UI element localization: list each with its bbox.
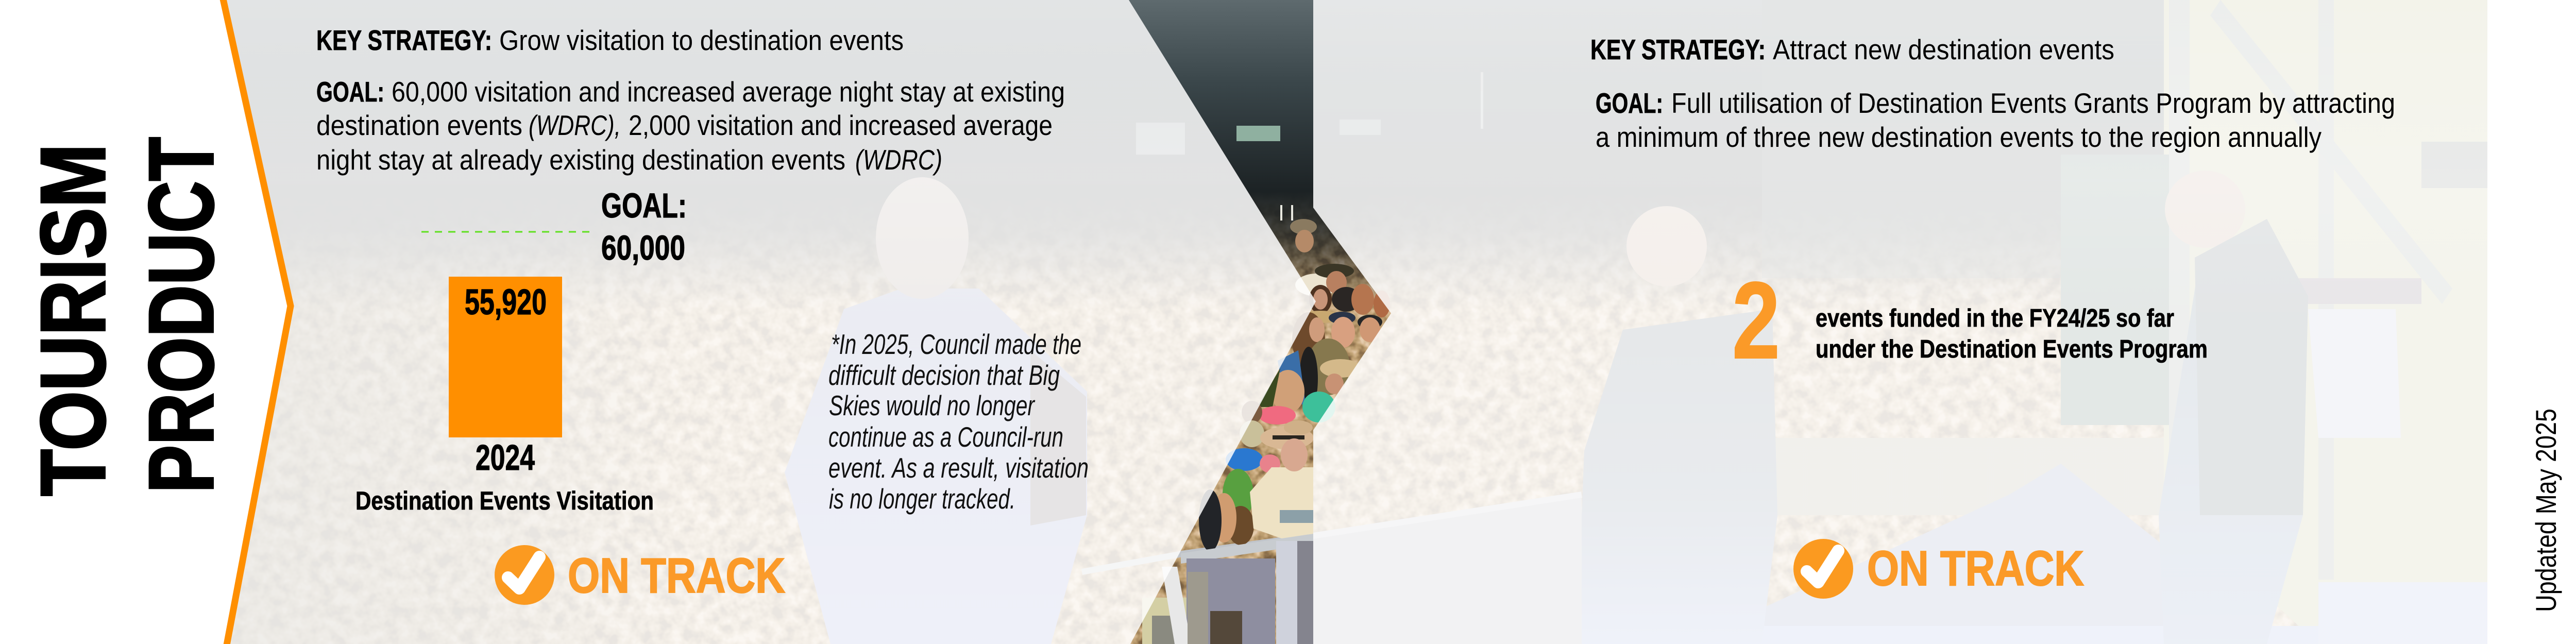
crowd seen through chevron xyxy=(1142,219,1390,644)
title: tourism product xyxy=(22,137,232,496)
italic footnote xyxy=(828,328,1089,515)
big number: 2 xyxy=(1732,259,1780,381)
right key strategy text: KEY STRATEGY: xyxy=(1590,33,1766,65)
icon: check circle xyxy=(495,545,554,605)
left goal text: destination events xyxy=(316,109,522,141)
right performer two xyxy=(2159,219,2308,644)
goal label xyxy=(601,187,687,267)
italic footnote: event. As a result, visitation xyxy=(828,452,1089,484)
stat description xyxy=(1816,304,2208,363)
venue lights xyxy=(1136,123,1185,155)
on track label: ON TRACK xyxy=(1867,541,2084,596)
goal dashed line xyxy=(421,231,590,233)
goal label: 60,000 xyxy=(601,229,685,267)
italic footnote: *In 2025, Council made the xyxy=(831,328,1081,360)
on track label: ON TRACK xyxy=(568,548,785,603)
chart caption: Destination Events Visitation xyxy=(355,486,654,515)
left goal text: night stay at already existing destination events xyxy=(316,144,845,176)
right performer one xyxy=(1577,309,1777,644)
left white title panel xyxy=(0,0,291,644)
left translucent panel xyxy=(227,0,1316,644)
right white margin xyxy=(2487,0,2576,644)
title: tourism product: TOURISM xyxy=(22,144,124,496)
left key strategy text: Grow visitation to destination events xyxy=(499,24,904,56)
right key strategy text xyxy=(1590,33,2114,65)
front barrier behind right panel xyxy=(1313,495,1582,644)
right key strategy text: Attract new destination events xyxy=(1773,33,2114,65)
updated date note: Updated May 2025 xyxy=(2530,409,2562,612)
left goal text: 60,000 visitation and increased average night stay at existing xyxy=(392,76,1065,108)
right on track status xyxy=(1793,539,2084,599)
left goal text: GOAL: xyxy=(316,76,384,108)
right goal text xyxy=(1596,87,2395,153)
left goal text xyxy=(316,76,1065,176)
bar value: 55,920 xyxy=(465,282,547,322)
left key strategy text xyxy=(316,24,904,56)
title: tourism product: PRODUCT xyxy=(130,137,232,493)
icon: check circle xyxy=(1793,539,1853,599)
left goal text: 2,000 visitation and increased average xyxy=(629,109,1053,141)
right translucent panel xyxy=(1313,0,2487,644)
big stat: 2 events funded xyxy=(1732,259,2208,381)
orange chevron divider xyxy=(223,0,291,644)
left on track status xyxy=(495,545,785,605)
orange bar xyxy=(449,277,562,437)
italic footnote: Skies would no longer xyxy=(829,389,1036,421)
bar year: 2024 xyxy=(476,437,535,478)
right goal text: GOAL: xyxy=(1596,87,1663,119)
italic footnote: difficult decision that Big xyxy=(828,359,1060,391)
italic footnote: continue as a Council-run xyxy=(828,421,1063,453)
bar chart: destination events visitation xyxy=(355,187,687,515)
goal label: GOAL: xyxy=(601,187,687,225)
right goal text: Full utilisation of Destination Events Grants Program by attracting xyxy=(1671,87,2395,119)
stat description: under the Destination Events Program xyxy=(1816,335,2208,363)
left key strategy text: KEY STRATEGY: xyxy=(316,24,492,56)
italic footnote: is no longer tracked. xyxy=(829,483,1015,515)
left singer xyxy=(785,289,1087,644)
stage floor and speakers xyxy=(1752,438,2164,515)
left goal text: (WDRC), xyxy=(529,109,621,141)
left goal text: (WDRC) xyxy=(855,144,942,176)
right goal text: a minimum of three new destination events to the region annually xyxy=(1596,121,2321,153)
stat description: events funded in the FY24/25 so far xyxy=(1816,304,2174,332)
stage curtain xyxy=(2164,0,2487,644)
